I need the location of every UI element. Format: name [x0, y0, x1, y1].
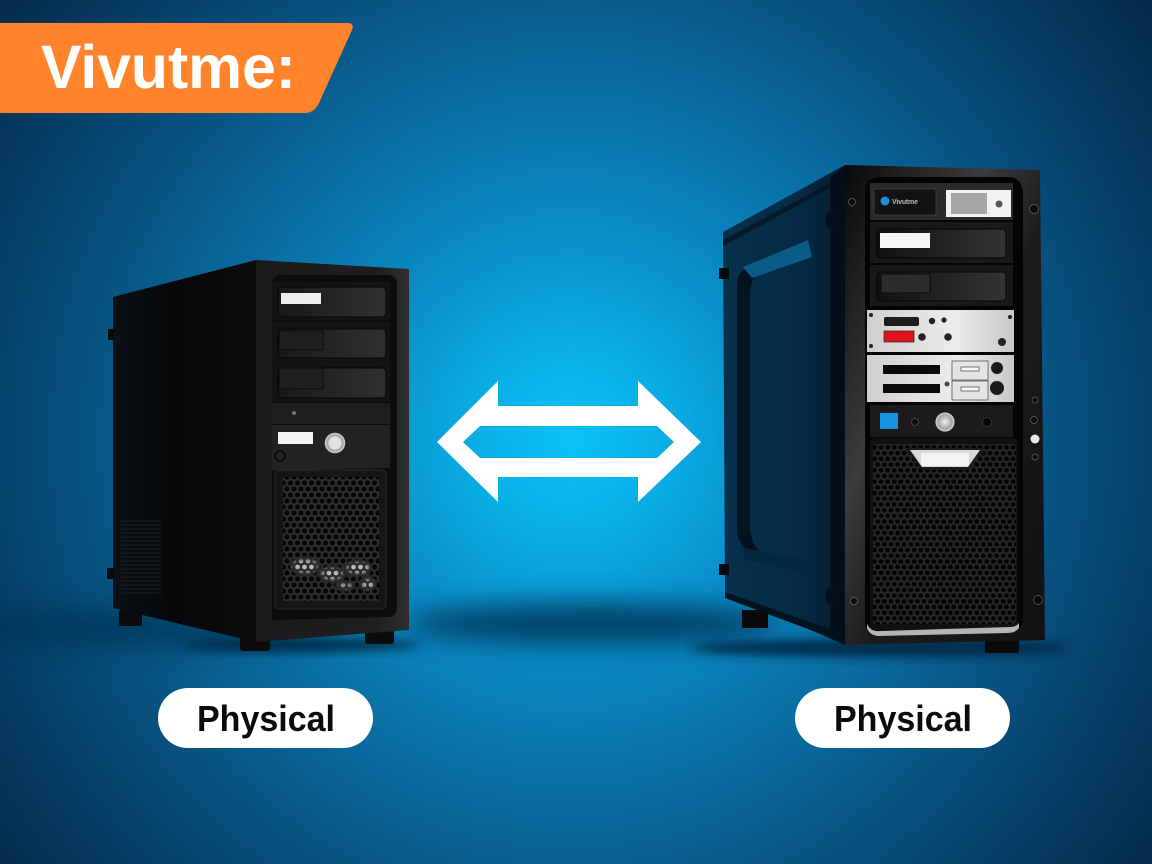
- right tower top bay: Vivutme: [892, 199, 918, 206]
- right label pill: [795, 688, 1010, 748]
- right tower front panel: [845, 165, 1045, 645]
- right computer tower: [719, 165, 1045, 653]
- left computer tower: [107, 260, 409, 651]
- right tower control panel: [870, 405, 1013, 437]
- double-headed arrow: [437, 381, 701, 502]
- right tower silver panel 1: [867, 310, 1014, 352]
- left tower blank bay: [272, 403, 390, 424]
- left label text: Physical: [197, 698, 335, 739]
- right tower top bay: [870, 183, 1013, 220]
- left tower feet: [119, 610, 394, 651]
- left tower front panel: [256, 260, 409, 642]
- right tower drive bay 2: [870, 265, 1013, 306]
- right label text: Physical: [834, 698, 972, 739]
- left tower drive bay 1: [272, 282, 390, 320]
- left label pill: [158, 688, 373, 748]
- left tower mesh grille: [275, 470, 386, 609]
- right tower mesh grille: [870, 438, 1018, 630]
- right tower handle: [905, 448, 985, 470]
- title banner: [0, 23, 353, 113]
- right tower feet: [742, 610, 1019, 653]
- right tower side panel: [719, 165, 845, 645]
- right tower drive bay 1: [870, 222, 1013, 263]
- title text: Vivutme:: [41, 33, 296, 101]
- left tower control panel: [272, 425, 390, 470]
- right tower silver panel 2: [867, 355, 1014, 402]
- left tower drive bay 3: [272, 362, 390, 402]
- left tower drive bay 2: [272, 322, 390, 362]
- right tower bottom trim: [867, 623, 1019, 636]
- left tower side panel: [107, 260, 256, 642]
- floor shadows: [0, 602, 1070, 657]
